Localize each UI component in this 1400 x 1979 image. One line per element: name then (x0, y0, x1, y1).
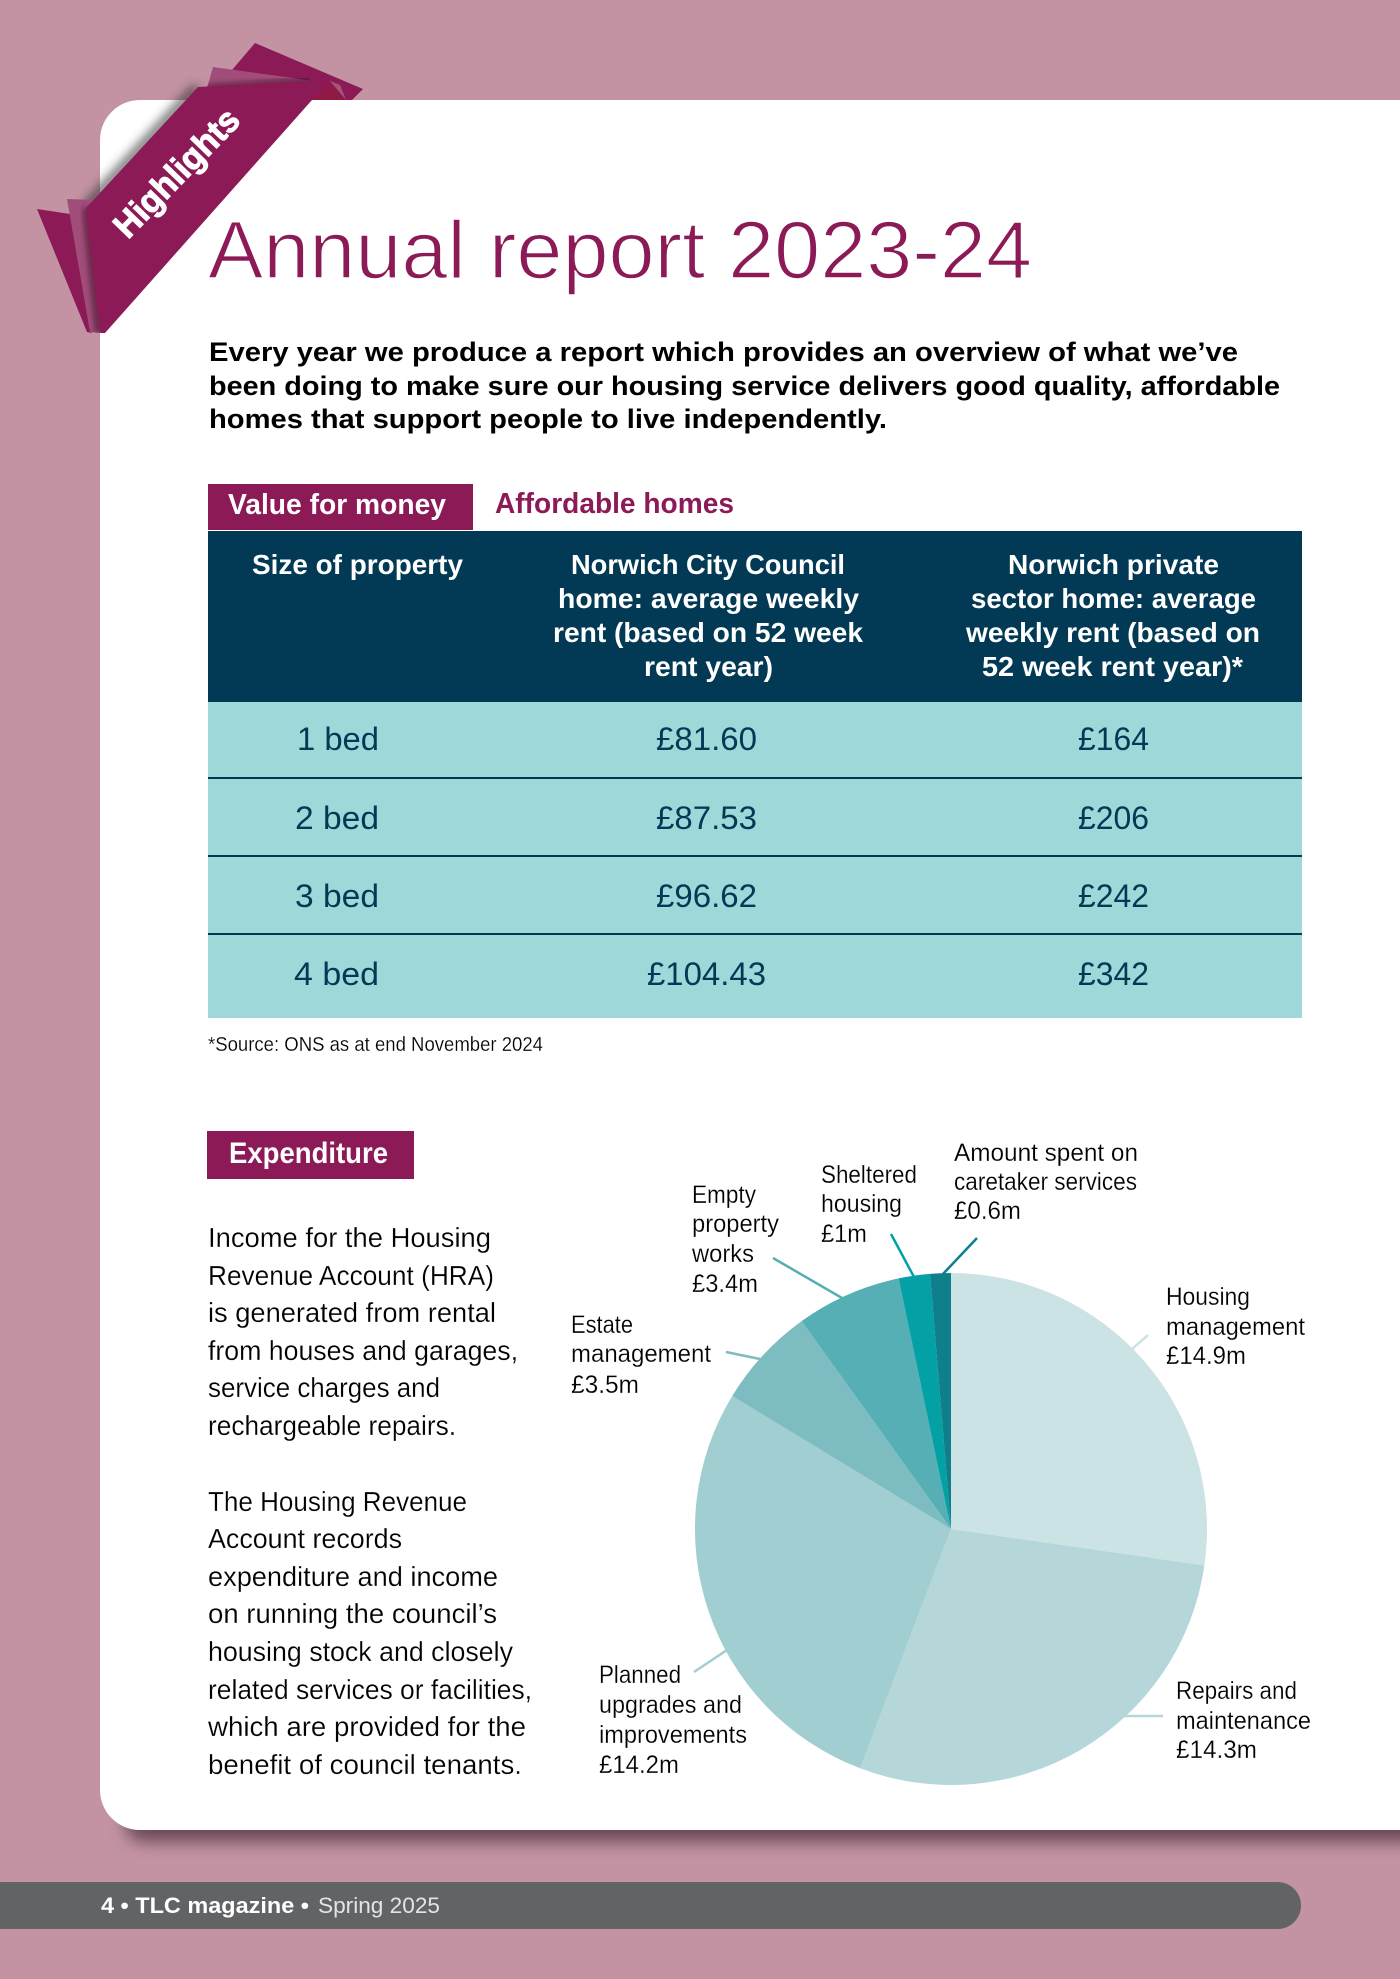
intro text: been doing to make sure our housing service delivers good quality, affordable (209, 371, 1280, 401)
table body: 1 bed (297, 721, 379, 757)
table body: £81.60 (656, 721, 757, 757)
label: sheltered housing: Sheltered (821, 1161, 917, 1189)
label: empty property works: works (691, 1240, 754, 1268)
text block: HRA records: The Housing Revenue (208, 1486, 467, 1517)
footer bar (0, 1882, 1301, 1929)
label: caretaker services: £0.6m (954, 1197, 1021, 1225)
text block: HRA records: which are provided for the (207, 1711, 526, 1742)
ribbon: Highlights banner (37, 43, 363, 333)
label: estate management (571, 1311, 711, 1399)
text block: HRA records: Account records (208, 1523, 402, 1554)
label: sheltered housing (821, 1161, 917, 1248)
table body: £242 (1078, 878, 1149, 914)
table header: home: average weekly (558, 583, 859, 614)
table header: 52 week rent year)* (982, 651, 1243, 682)
table header (208, 531, 1302, 702)
table body: 4 bed (294, 956, 379, 992)
label: housing management: £14.9m (1166, 1342, 1246, 1370)
label: caretaker services: caretaker services (954, 1168, 1137, 1196)
text block: HRA income: rechargeable repairs. (208, 1410, 456, 1441)
table body: £96.62 (656, 878, 757, 914)
table header: Norwich private (1008, 549, 1219, 580)
text block: HRA income: Income for the Housing (208, 1222, 491, 1253)
label: planned upgrades: £14.2m (599, 1751, 679, 1779)
label: repairs and maintenance: Repairs and (1176, 1677, 1297, 1705)
table header: rent (based on 52 week (553, 617, 863, 648)
label: housing management (1166, 1283, 1305, 1370)
label: empty property works (691, 1181, 779, 1298)
label: planned upgrades: upgrades and (599, 1691, 742, 1719)
table header: weekly rent (based on (965, 617, 1260, 648)
label: repairs and maintenance: maintenance (1176, 1707, 1311, 1735)
heading: Affordable homes: Affordable homes (495, 488, 734, 520)
text block: HRA records: related services or facilities, (208, 1674, 532, 1705)
label: planned upgrades: Planned (599, 1661, 681, 1689)
table body (208, 702, 1302, 1018)
intro text: Every year we produce a report which provides an overview of what we’ve (209, 337, 1238, 367)
tab: Expenditure: Expenditure (229, 1137, 388, 1170)
text block: HRA income: is generated from rental (208, 1297, 496, 1328)
label: empty property works: Empty (692, 1181, 756, 1209)
label: planned upgrades (599, 1661, 747, 1779)
table body: £87.53 (656, 800, 757, 836)
label: housing management: management (1166, 1313, 1305, 1341)
label: empty property works: £3.4m (692, 1270, 758, 1298)
label: planned upgrades: improvements (599, 1721, 747, 1749)
text block: HRA records: housing stock and closely (208, 1636, 513, 1667)
text block: HRA records: on running the council’s (208, 1598, 497, 1629)
label: repairs and maintenance: £14.3m (1176, 1736, 1257, 1764)
label: estate management: Estate (571, 1311, 633, 1339)
tab: Value for money: Value for money (228, 489, 446, 521)
label: caretaker services: Amount spent on (954, 1139, 1138, 1167)
table body: 2 bed (295, 800, 379, 836)
text block: HRA records: benefit of council tenants. (208, 1749, 522, 1780)
footer bar: Spring 2025 (318, 1893, 440, 1918)
table header: Norwich City Council (571, 549, 845, 580)
text block: HRA income: Revenue Account (HRA) (208, 1260, 494, 1291)
table body: 3 bed (295, 878, 379, 914)
table header: sector home: average (971, 583, 1256, 614)
ribbon: Highlights banner: Highlights (106, 100, 248, 246)
text block: HRA income: from houses and garages, (208, 1335, 518, 1366)
label: sheltered housing: £1m (821, 1220, 867, 1248)
table header: Size of property (252, 549, 463, 580)
tab: Expenditure (207, 1131, 414, 1179)
table: weekly rents (208, 531, 1302, 1018)
table body: £164 (1078, 721, 1149, 757)
text block: HRA records (207, 1486, 532, 1780)
leader lines (694, 1234, 1163, 1716)
label: empty property works: property (692, 1210, 779, 1238)
label: sheltered housing: housing (821, 1190, 902, 1218)
text block: HRA records: expenditure and income (208, 1561, 498, 1592)
source note: *Source: ONS as at end November 2024 (208, 1034, 543, 1056)
intro text (209, 337, 1280, 434)
label: caretaker services (954, 1139, 1138, 1225)
text block: HRA income (208, 1222, 518, 1441)
tab: Value for money (208, 484, 473, 530)
table body: £104.43 (647, 956, 766, 992)
label: repairs and maintenance (1176, 1677, 1311, 1764)
footer bar: 4 • TLC magazine • (101, 1893, 309, 1918)
label: estate management: £3.5m (571, 1371, 639, 1399)
label: housing management: Housing (1166, 1283, 1250, 1311)
pie chart: expenditure (571, 1139, 1311, 1785)
text block: HRA income: service charges and (208, 1372, 440, 1403)
table header: rent year) (644, 651, 773, 682)
title: Annual report 2023-24 (208, 205, 1032, 296)
label: estate management: management (571, 1340, 711, 1368)
pie slices (695, 1273, 1207, 1785)
table body: £342 (1078, 956, 1149, 992)
intro text: homes that support people to live independently. (209, 404, 887, 434)
table body: £206 (1078, 800, 1149, 836)
